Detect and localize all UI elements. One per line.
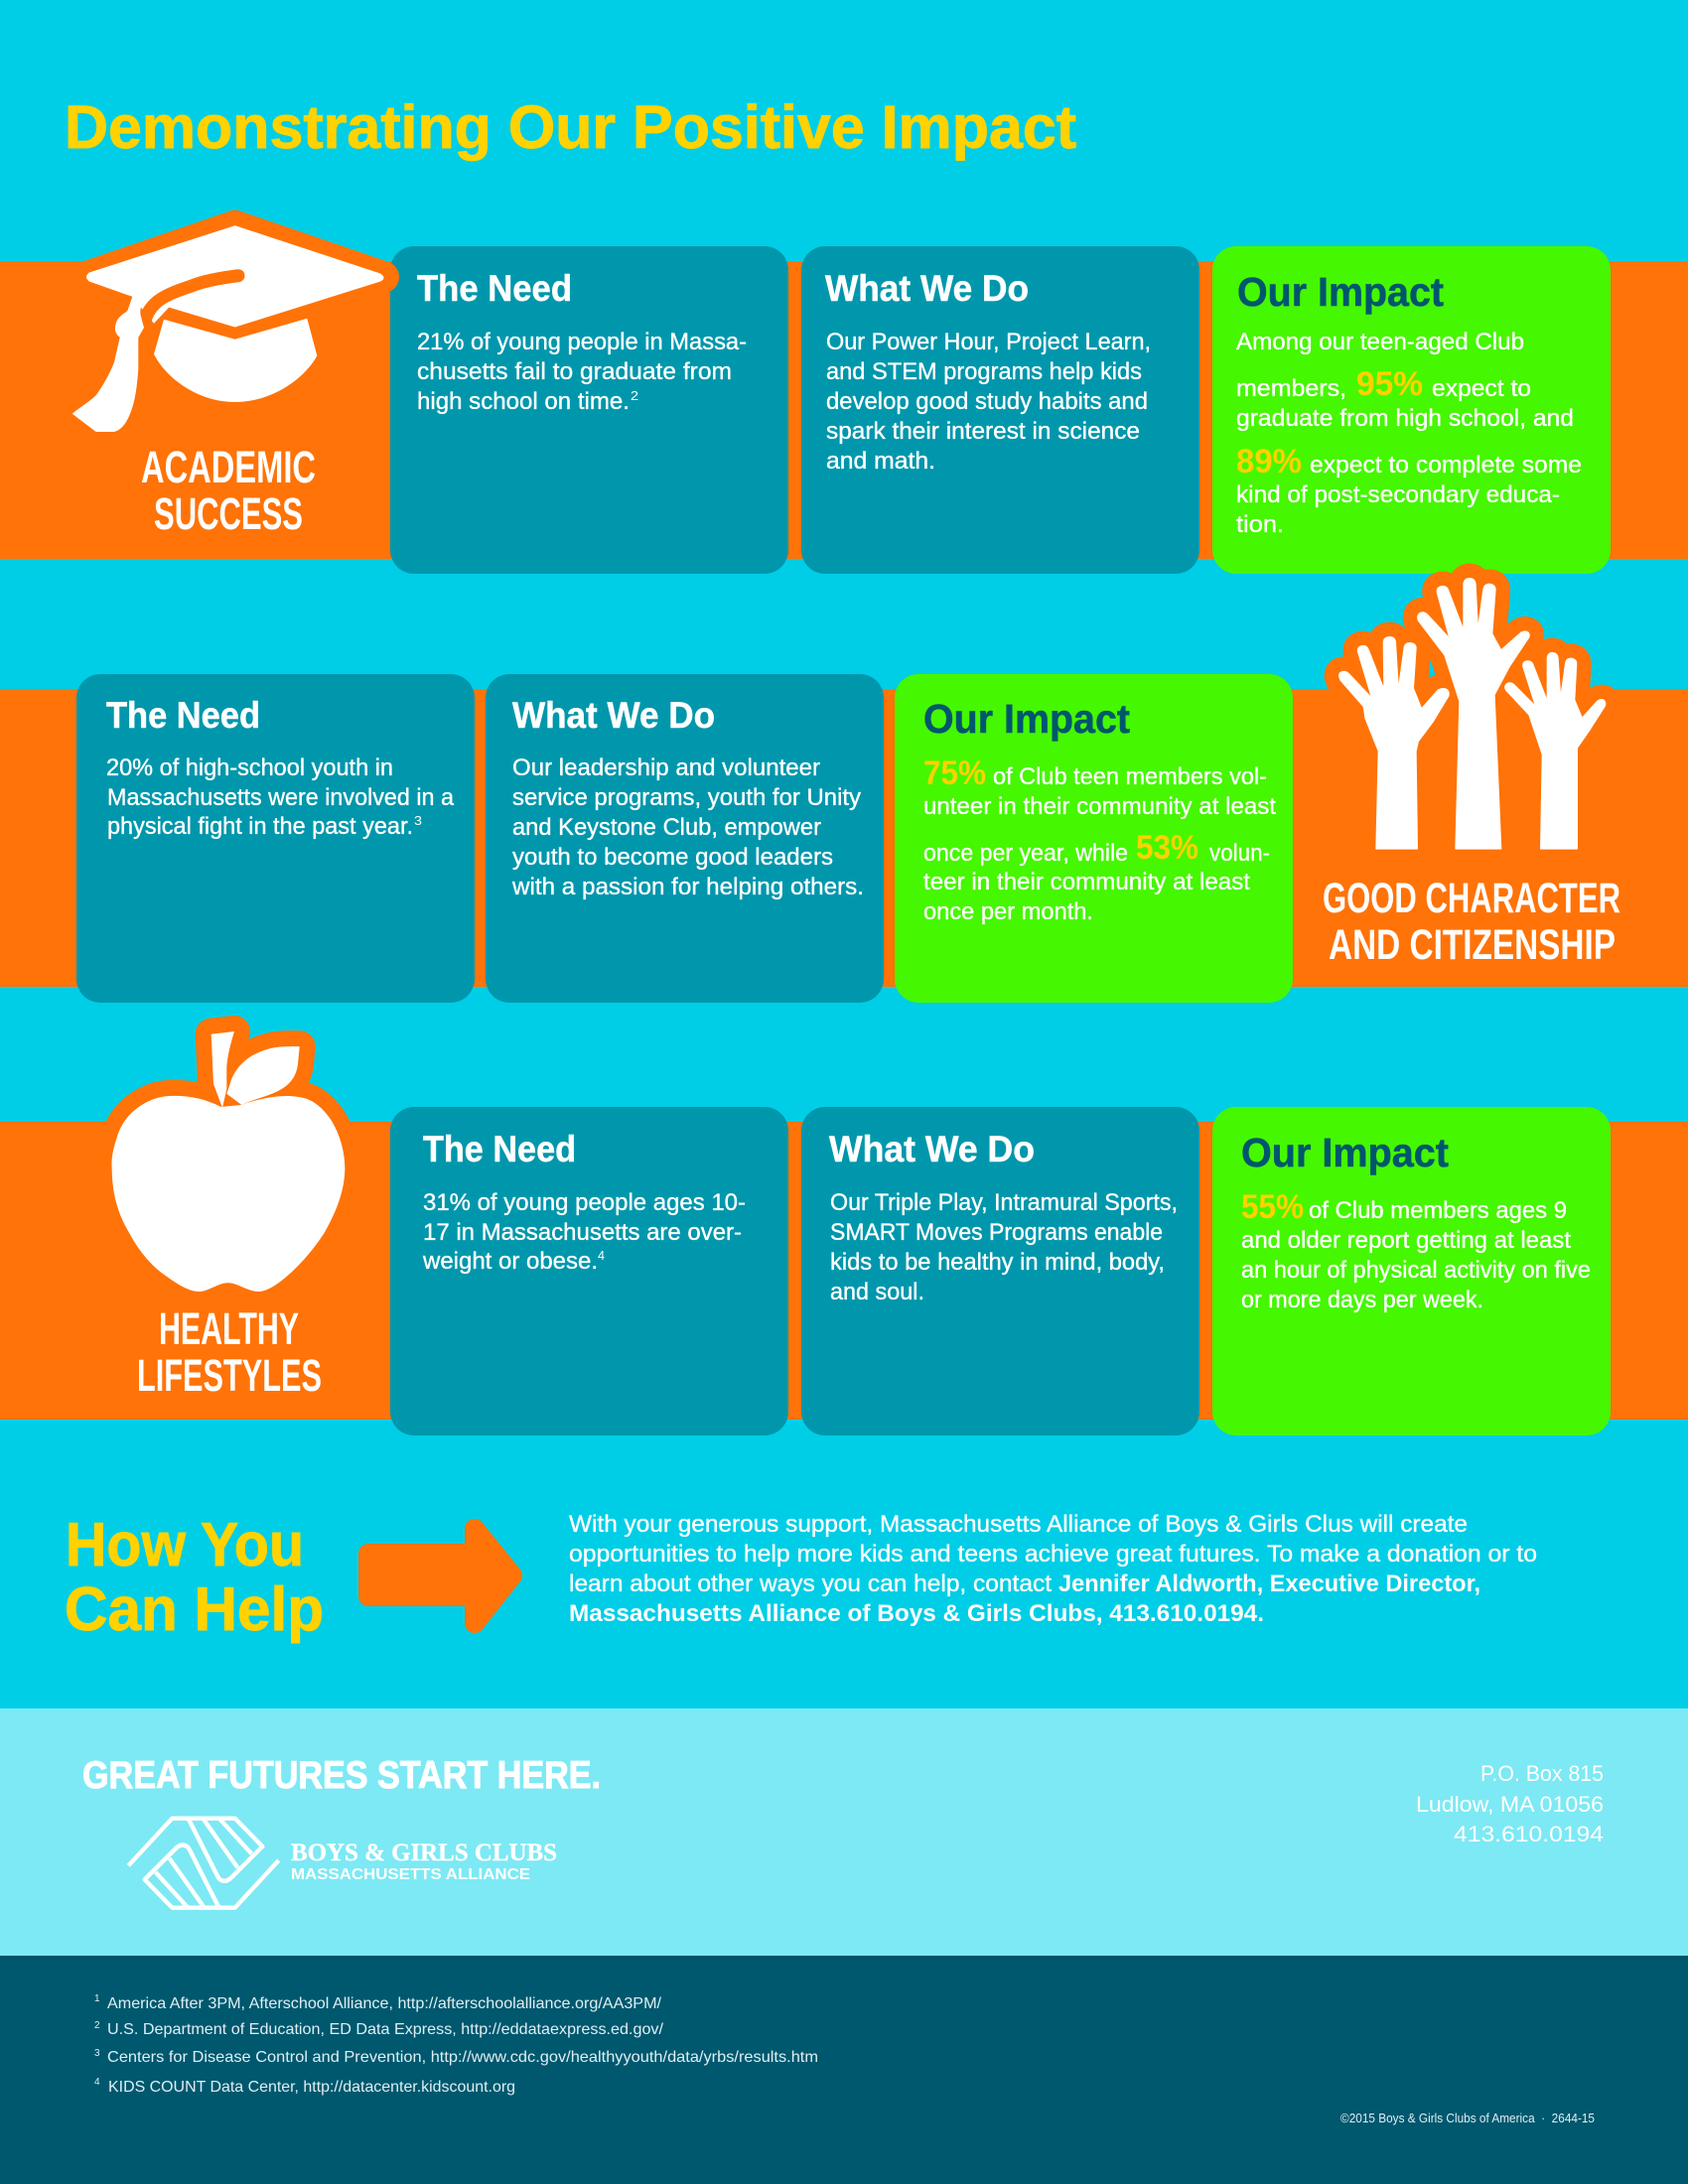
heading: our impact: Our Impact	[1241, 1130, 1449, 1175]
label: healthy lifestyles: LIFESTYLES	[137, 1350, 322, 1401]
text block: impact: Among our teen-aged Club	[1236, 329, 1524, 355]
text block: impact: of Club teen members vol-	[993, 763, 1267, 790]
heading: the need: The Need	[417, 268, 572, 309]
text block: impact: or more days per week.	[1241, 1287, 1483, 1313]
footnotes: 3	[94, 2048, 100, 2059]
text block: impact	[1236, 329, 1582, 538]
address: Ludlow, MA 01056	[1416, 1792, 1604, 1817]
text block: need	[417, 329, 747, 415]
text block: call to action: opportunities to help more kids and teens achieve great futures. To make a donation or to	[569, 1541, 1537, 1568]
footnotes	[94, 1993, 818, 2096]
footer panel: dark	[0, 1956, 1688, 2184]
text block: impact: 55%	[1241, 1188, 1304, 1226]
text block: impact: 95%	[1356, 365, 1423, 403]
panel: our impact, academic success	[1212, 246, 1611, 574]
text block: need: weight or obese.	[422, 1248, 598, 1275]
text block: need: 20% of high-school youth in	[106, 754, 393, 781]
text block: call to action: Massachusetts Alliance of Boys & Girls Clubs, 413.610.0194.	[569, 1600, 1264, 1627]
text block: call to action: learn about other ways you can help, contact	[569, 1570, 1052, 1597]
text block: impact	[1241, 1188, 1591, 1313]
text block: what we do: Our Power Hour, Project Learn,	[826, 329, 1151, 355]
label: academic success: SUCCESS	[154, 488, 303, 539]
orange band row 3	[0, 1122, 1688, 1420]
address: P.O. Box 815	[1480, 1761, 1604, 1786]
label: academic success: ACADEMIC	[141, 442, 316, 492]
text block: call to action: Jennifer Aldworth, Executive Director,	[1058, 1570, 1480, 1597]
heading: our impact: Our Impact	[923, 696, 1130, 742]
panel: the need, healthy lifestyles	[390, 1107, 788, 1435]
text block: impact: 89%	[1236, 443, 1302, 480]
footnotes: U.S. Department of Education, ED Data Express, http://eddataexpress.ed.gov/	[107, 2021, 664, 2038]
icon: graduation cap	[72, 226, 383, 432]
text block: impact: expect to complete some	[1310, 452, 1582, 478]
text block: what we do	[830, 1189, 1178, 1305]
text block: what we do: kids to be healthy in mind, body,	[830, 1249, 1165, 1276]
label: academic success	[141, 442, 316, 539]
text block: impact: volun-	[1209, 840, 1270, 867]
row 2: good character and citizenship	[0, 579, 1688, 1003]
text block: what we do: and soul.	[830, 1279, 924, 1305]
text block: need: 21% of young people in Massa-	[417, 329, 747, 355]
heading: what we do: What We Do	[829, 1129, 1035, 1169]
footer panel: light blue	[0, 1708, 1688, 1956]
text block: need: high school on time.	[417, 388, 630, 415]
title: Demonstrating Our Positive Impact	[65, 93, 1076, 161]
label: good character and citizenship	[1323, 875, 1620, 969]
text block: call to action	[569, 1511, 1537, 1627]
footnotes: 4	[94, 2077, 100, 2088]
text block: impact: expect to	[1432, 375, 1531, 402]
text block: what we do: and Keystone Club, empower	[512, 814, 821, 841]
text block: what we do: SMART Moves Programs enable	[830, 1219, 1163, 1246]
address	[1416, 1761, 1604, 1846]
text block: need: chusetts fail to graduate from	[417, 358, 732, 385]
footnotes: 2	[94, 2020, 100, 2031]
text block: need: 31% of young people ages 10-	[423, 1189, 746, 1216]
address: 413.610.0194	[1454, 1822, 1604, 1846]
text block: need: physical fight in the past year.	[107, 813, 413, 840]
heading: our impact: Our Impact	[1237, 269, 1444, 315]
copyright: ©2015 Boys & Girls Clubs of America · 2644-15	[1340, 2111, 1595, 2125]
logo wordmark: BOYS & GIRLS CLUBS	[291, 1840, 557, 1866]
icon: interlocking hands	[128, 1819, 279, 1908]
orange band row 1	[0, 261, 1688, 559]
panel: what we do, healthy lifestyles	[801, 1107, 1199, 1435]
heading: how you can help	[65, 1511, 324, 1644]
logo subline: MASSACHUSETTS ALLIANCE	[291, 1866, 530, 1883]
text block: need	[422, 1189, 746, 1275]
orange band row 2	[0, 689, 1688, 987]
text block: what we do	[826, 329, 1151, 475]
label: healthy lifestyles	[137, 1303, 322, 1401]
text block: call to action: With your generous support, Massachusetts Alliance of Boys & Girls Clus will create	[569, 1511, 1468, 1538]
text block: what we do: Our leadership and volunteer	[512, 754, 820, 781]
label: healthy lifestyles: HEALTHY	[159, 1303, 299, 1354]
label: good character and citizenship: AND CITIZENSHIP	[1329, 921, 1616, 969]
row 3: healthy lifestyles	[0, 1031, 1688, 1435]
text block: what we do: service programs, youth for Unity	[512, 784, 861, 811]
text block: what we do: with a passion for helping others.	[511, 874, 864, 900]
panel: our impact, healthy lifestyles	[1212, 1107, 1611, 1435]
icon: raised hands	[1339, 579, 1606, 849]
panel: the need, academic success	[390, 246, 788, 574]
text block: impact	[923, 754, 1276, 925]
text block: what we do: Our Triple Play, Intramural Sports,	[830, 1189, 1178, 1216]
text block: what we do: develop good study habits and	[826, 388, 1148, 415]
text block: impact: graduate from high school, and	[1236, 405, 1574, 432]
text block: need: Massachusetts were involved in a	[107, 784, 455, 811]
text block: need	[106, 754, 455, 840]
panel: our impact, good character	[895, 674, 1293, 1003]
text block: impact: tion.	[1236, 511, 1284, 538]
text block: impact: unteer in their community at least	[923, 793, 1276, 820]
text block: what we do: and STEM programs help kids	[826, 358, 1142, 385]
text block: need: 4	[598, 1248, 605, 1263]
panel: what we do, academic success	[801, 246, 1199, 574]
text block: what we do	[511, 754, 864, 900]
text block: need: 2	[631, 388, 638, 403]
heading: how you can help: Can Help	[65, 1575, 324, 1644]
heading: what we do: What We Do	[825, 268, 1029, 309]
icon: apple	[112, 1031, 345, 1292]
text block: impact: and older report getting at least	[1241, 1227, 1571, 1254]
heading: what we do: What We Do	[512, 695, 715, 736]
panel: what we do, good character	[486, 674, 884, 1003]
text block: impact: 53%	[1136, 829, 1198, 867]
text block: what we do: youth to become good leaders	[512, 844, 833, 871]
footnotes: Centers for Disease Control and Prevention, http://www.cdc.gov/healthyyouth/data/yrbs/results.htm	[107, 2049, 818, 2066]
footnotes: America After 3PM, Afterschool Alliance, http://afterschoolalliance.org/AA3PM/	[107, 1995, 662, 2012]
footnotes: 1	[94, 1993, 100, 2004]
text block: impact: kind of post-secondary educa-	[1236, 481, 1560, 508]
section: how you can help	[65, 1511, 1537, 1644]
heading: the need: The Need	[106, 695, 260, 736]
panel: the need, good character	[76, 674, 475, 1003]
heading: the need: The Need	[423, 1129, 576, 1169]
text block: impact: once per year, while	[923, 840, 1128, 867]
text block: need: 3	[414, 813, 422, 828]
text block: need: 17 in Massachusetts are over-	[423, 1219, 742, 1246]
logo: boys and girls clubs	[128, 1819, 557, 1908]
text block: impact: once per month.	[923, 898, 1093, 925]
tagline: GREAT FUTURES START HERE.	[82, 1754, 601, 1797]
text block: impact: 75%	[923, 754, 986, 792]
text block: impact: an hour of physical activity on five	[1241, 1257, 1591, 1284]
text block: what we do: spark their interest in science	[826, 418, 1140, 445]
footnotes: KIDS COUNT Data Center, http://datacenter.kidscount.org	[108, 2079, 515, 2096]
text block: impact: of Club members ages 9	[1309, 1197, 1567, 1224]
text block: impact: members,	[1236, 375, 1346, 402]
row 1: academic success	[0, 226, 1688, 574]
heading: how you can help: How You	[66, 1511, 304, 1579]
arrow	[368, 1529, 512, 1623]
text block: impact: teer in their community at least	[923, 869, 1250, 895]
text block: what we do: and math.	[826, 448, 935, 475]
